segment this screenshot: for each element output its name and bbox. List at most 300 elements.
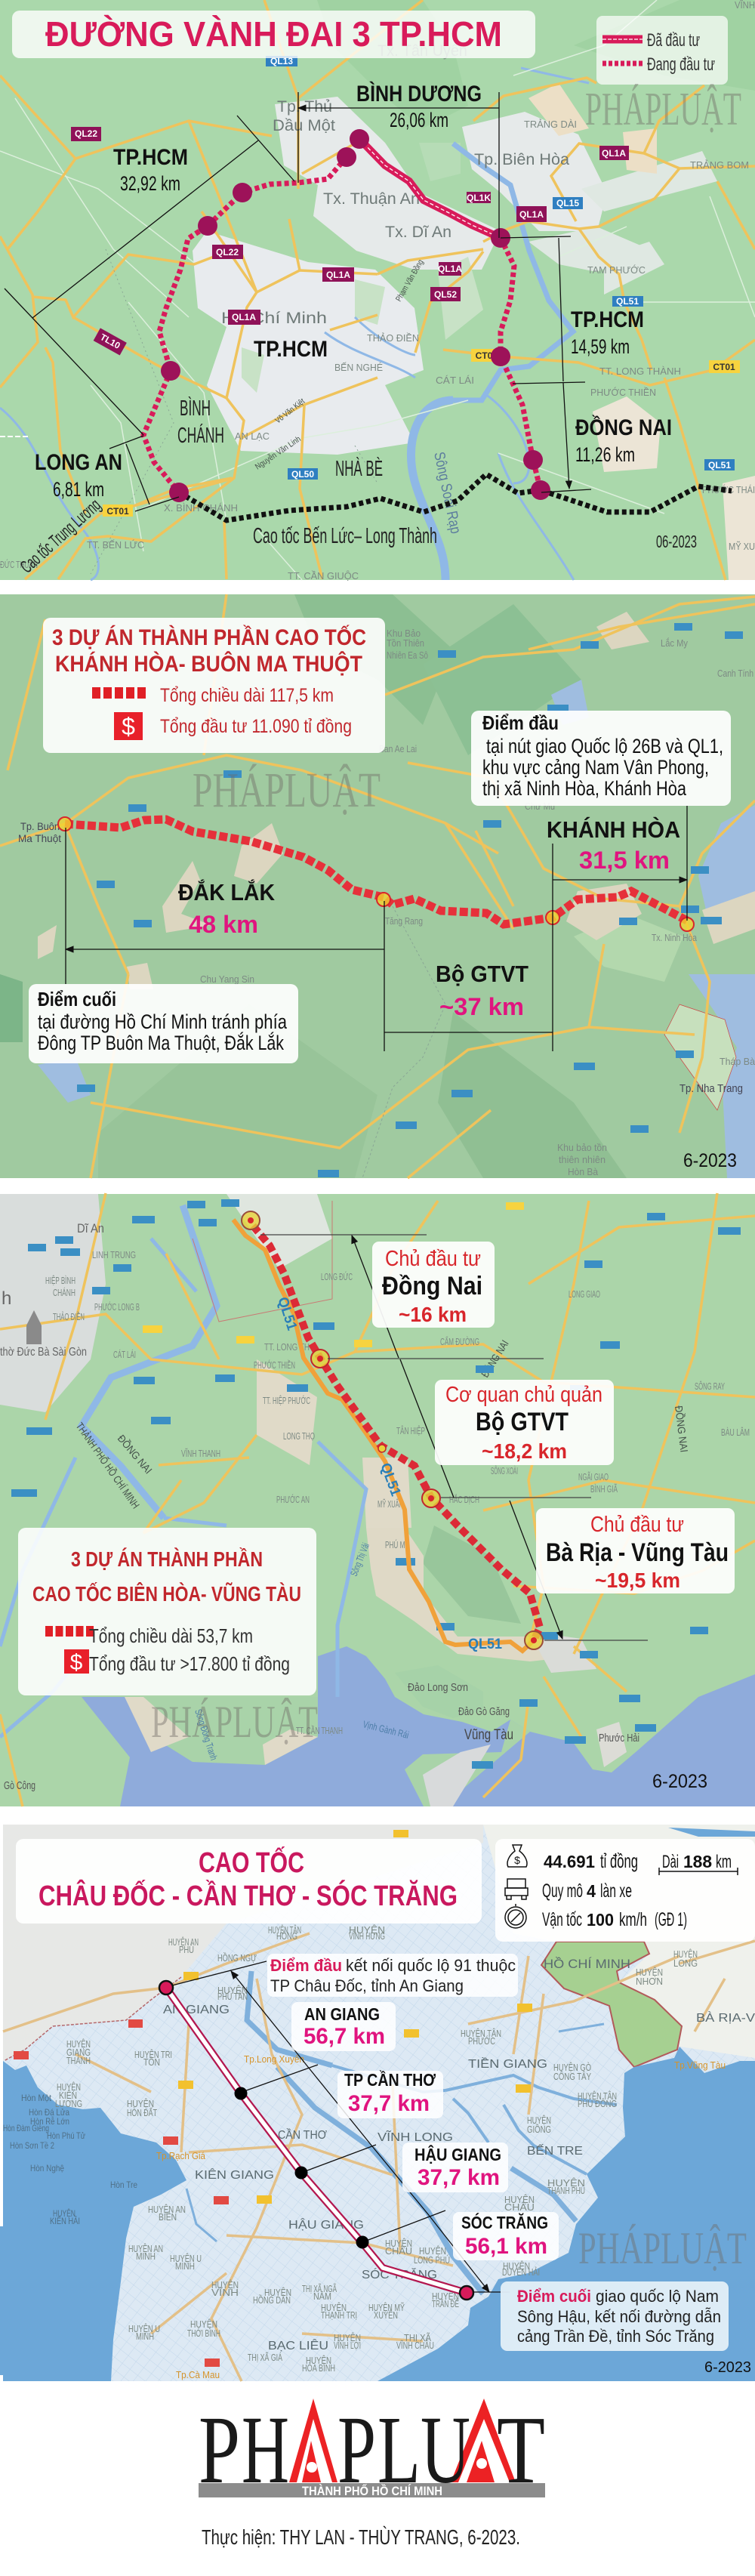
map labels: TRẢNG BOM [690, 159, 749, 171]
map labels: Tp. Nha Trang [680, 1082, 743, 1095]
icon: truck [505, 1879, 528, 1899]
map labels: CẦN THƠ [278, 2127, 327, 2142]
date: 6-2023 [652, 1771, 707, 1792]
map labels: HUYỆN [57, 2081, 81, 2093]
map labels: Nguyễn Văn Linh [253, 434, 303, 471]
place labels: NHÀ BÈ [335, 456, 383, 481]
map labels: HUYỆN AN [168, 1936, 199, 1948]
logo: Phap Luat: P [199, 2396, 240, 2504]
map labels: TRẦN ĐỀ [432, 2298, 459, 2309]
length text: 188 [683, 1852, 712, 1871]
label: TP.HCM west [113, 145, 188, 195]
road badges: CT0 [476, 350, 493, 361]
map labels: Vũng Tàu [464, 1727, 513, 1743]
map labels: TT. LONG THÀNH [599, 366, 681, 377]
map labels: CÁT LÁI [436, 375, 474, 386]
callout: Soc Trang [453, 2212, 559, 2260]
map labels: DUYÊN HẢI [502, 2266, 540, 2278]
length text: km [716, 1852, 732, 1872]
map labels: HUYỆN [321, 2302, 347, 2313]
map labels: HUYỆN AN [128, 2243, 163, 2254]
lanes text: Quy mô [542, 1880, 583, 1902]
label: Dak Lak: ĐẮK LẮK [178, 878, 276, 905]
callout: Dong Nai: Chủ đầu tư [385, 1247, 481, 1271]
icon: money bag [507, 1845, 527, 1867]
callout: start point [267, 1954, 518, 1997]
map labels: Tp. Thủ [277, 98, 332, 116]
legend box: Tổng chiều dài 53,7 km [89, 1624, 253, 1647]
map labels: BIÊN [159, 2211, 177, 2223]
label: TP.HCM west: TP.HCM [113, 145, 188, 170]
map labels: LONG ĐỨC [321, 1271, 353, 1282]
road badges: TL10 [98, 332, 122, 351]
logo: Phap Luat: THÀNH PHỐ HỒ CHÍ MINH [302, 2483, 442, 2498]
map labels [18, 628, 755, 1177]
callout: start point: kết nối quốc lộ 91 thuộc [346, 1956, 516, 1975]
cost text [544, 1849, 638, 1872]
length text [659, 1852, 738, 1875]
place labels: CHÁNH [177, 423, 224, 448]
map labels: LONG THỌ [283, 1430, 315, 1442]
map labels: Hòn Đá Lửa [29, 2107, 69, 2118]
map labels: VĨNH CHÂU [396, 2340, 434, 2351]
map labels: CHÂU [504, 2201, 535, 2213]
map labels: HUYỆN U [128, 2323, 160, 2334]
label: TP.HCM center: TP.HCM [254, 337, 328, 362]
callout: end point [501, 2281, 729, 2351]
watermark: PHÁPLUẬT [151, 1697, 318, 1747]
label: Long An: LONG AN [35, 450, 122, 475]
map labels: HUYỆN TÂN [268, 1924, 301, 1936]
map labels: MINH [175, 2260, 195, 2272]
map labels: Khu bảo tồn [557, 1142, 607, 1153]
map labels: BẾN NGHÉ [334, 362, 383, 373]
map labels: THỊ XÃ GIÁ [248, 2352, 282, 2363]
map labels: Tx. Dĩ An [385, 224, 451, 241]
nodes [242, 1211, 543, 1649]
map labels: HUYỆN TÂN [461, 2028, 501, 2039]
map labels: HUYỆN TÂN [578, 2090, 617, 2102]
icon: compass [505, 1904, 526, 1928]
road QL51: QL51 [274, 1295, 300, 1333]
road badges [178, 1830, 532, 2204]
road badges: QL52 [434, 289, 457, 300]
map labels: VĨNH LONG [378, 2129, 453, 2144]
map labels: HUYỆN [190, 2318, 217, 2330]
map labels: THÀNH PHỐ HỒ CHÍ MINH [74, 1420, 143, 1510]
icon: money bag: $ [514, 1854, 520, 1866]
callout: Hau Giang: 37,7 km [418, 2165, 500, 2190]
road badges: QL1A [438, 264, 462, 274]
map labels: Ma Thuột [18, 832, 61, 844]
callout: TP Can Tho [337, 2069, 443, 2118]
map labels: BẾN TRE [527, 2143, 583, 2158]
map labels: Tp. Buôn [20, 820, 60, 832]
label: Dong Nai [575, 415, 672, 466]
map labels: Sông Soài Rạp [430, 450, 464, 535]
road badges: QL1A [232, 312, 256, 322]
road badges [11, 1199, 741, 1769]
speed text [542, 1909, 687, 1930]
map labels: HUYỆN [432, 2291, 459, 2302]
map labels: Chư Mu [525, 801, 555, 812]
map labels: Võ Văn Kiệt [273, 397, 307, 425]
expressway route [253, 1226, 540, 1640]
legend box [43, 618, 385, 753]
map labels: HIỆP BÌNH [45, 1275, 76, 1286]
road badges: QL22 [216, 247, 239, 258]
logo: Phap Luat: H [242, 2396, 289, 2504]
map labels: THỊ XÃ [404, 2332, 431, 2343]
road badges: QL1A [519, 209, 544, 220]
map labels: THẢO ĐIỀN [367, 332, 419, 344]
label: Binh Duong: 26,06 km [390, 109, 448, 131]
map labels: HUYỆN [547, 2177, 585, 2189]
map labels: CHÁNH [53, 1287, 76, 1298]
legend box: 3 DỰ ÁN THÀNH PHẦN [71, 1547, 263, 1571]
map labels: HỒ CHÍ MINH [544, 1957, 630, 1971]
map labels: Tp.Rạch Giá [156, 2150, 206, 2161]
road badges: QL15 [556, 198, 579, 208]
map labels: HUYỆN [127, 2098, 154, 2109]
expressway route [65, 819, 687, 924]
label: Bo GTVT: Bộ GTVT [436, 961, 528, 987]
map labels: HẬU GIANG [288, 2217, 364, 2232]
map labels: KIÊN [59, 2090, 77, 2101]
road badges: QL1A [602, 148, 626, 159]
map labels: SÔNG RAY [695, 1381, 725, 1392]
map labels: VĨNH [211, 2287, 239, 2298]
length text: Dài [662, 1852, 679, 1872]
label: TP.HCM west: 32,92 km [120, 172, 180, 195]
label: TP.HCM east [571, 307, 644, 358]
map labels: CHÂU [385, 2245, 412, 2257]
place labels: Cao tốc Trung Lương [17, 495, 105, 577]
start point box: thị xã Ninh Hòa, Khánh Hòa [482, 777, 687, 800]
map labels: HUYỆN [503, 2260, 530, 2272]
title box [16, 1839, 482, 1924]
logo: Phap Luat: U [421, 2396, 470, 2504]
road badges: QL1A [326, 270, 350, 280]
info box [495, 1839, 755, 1942]
map labels: LONG [673, 1957, 698, 1969]
map labels: Tp.Cà Mau [176, 2369, 220, 2380]
measure lines [66, 806, 687, 1051]
label: Bo GTVT [436, 961, 528, 1020]
callout: Dong Nai: Đồng Nai [382, 1272, 482, 1300]
map labels: HUYỆN [385, 2238, 412, 2249]
callout: Soc Trang: SÓC TRĂNG [461, 2212, 548, 2232]
panel: Khanh Hoa - Buon Ma Thuot [0, 594, 755, 1178]
callout: An Giang [291, 2002, 396, 2051]
map labels: SÔNG XOÀI [491, 1465, 518, 1476]
nodes [159, 1981, 473, 2300]
map labels: TT. LONG TH [264, 1341, 310, 1353]
map labels: Sông Thị Vải [348, 1541, 371, 1578]
map labels: Dầu Một [273, 117, 335, 134]
map labels: THẠNH PHÚ [547, 2185, 585, 2196]
map labels: HUYỆN [211, 2279, 239, 2291]
map labels: THỊ XÃ NGÃ [302, 2283, 337, 2294]
credit: Thực hiện: THY LAN - THÙY TRANG, 6-2023. [202, 2525, 520, 2549]
legend box: $ [122, 713, 135, 740]
map labels: Hòn Rễ Lớn [30, 2115, 69, 2127]
legend: Đã đầu tư [647, 30, 700, 51]
road badges: CT01 [106, 506, 129, 517]
map labels: ĐỒNG NAI [478, 1337, 511, 1380]
map labels: HUYỆN [419, 2245, 446, 2257]
callout: Bo GTVT [435, 1380, 614, 1465]
legend box [18, 1528, 316, 1695]
end point box: Điểm cuối [38, 988, 116, 1010]
map labels: THỚI BÌNH [187, 2328, 220, 2339]
map labels: Đảo Gò Găng [458, 1705, 510, 1718]
map labels: Hòn Một [21, 2093, 52, 2103]
map labels: TT. CẦN GIUỘC [288, 570, 359, 582]
map labels: CÔNG TÂY [553, 2071, 591, 2082]
speed text: (GĐ 1) [655, 1909, 687, 1930]
legend box: Tổng đầu tư >17.800 tỉ đồng [89, 1652, 290, 1675]
start point box: Điểm đầu [482, 711, 559, 734]
callout: Bo GTVT: Bộ GTVT [476, 1408, 569, 1436]
map labels: PHƯỚC THIỀN [254, 1359, 295, 1371]
callout: Ba Ria - Vung Tau: Chủ đầu tư [590, 1513, 684, 1537]
expressway Ben Luc - Long Thanh [179, 474, 732, 520]
map labels: THÀNH [66, 2055, 91, 2066]
road QL51 [233, 1220, 534, 1652]
date: 6-2023 [683, 1150, 737, 1171]
map labels: HÒA BÌNH [302, 2362, 335, 2374]
map labels: HUYỆN GÒ [553, 2062, 591, 2073]
map labels: X. BÌNH CHÁNH [164, 502, 238, 514]
map labels: THẠNH TRỊ [321, 2309, 357, 2321]
callout: Bo GTVT: ~18,2 km [482, 1439, 567, 1463]
node circles [161, 129, 550, 502]
map labels: LƯƠNG [55, 2098, 82, 2109]
callout: Hau Giang: HẬU GIANG [414, 2144, 501, 2164]
lanes text: 4 [587, 1881, 596, 1901]
map labels: Gò Công [4, 1779, 35, 1792]
map labels: BÀ RỊA-V [696, 2010, 755, 2025]
map labels: TIỀN GIANG [468, 2056, 547, 2071]
place labels: 06-2023 [656, 532, 697, 551]
watermark: PHÁPLUẬT [193, 763, 381, 818]
map labels: HUYỆN [636, 1967, 663, 1978]
map labels: HỒNG NGỰ [217, 1952, 257, 1964]
map labels: GIỒNG [527, 2124, 551, 2135]
map labels: SÓC TRĂNG [362, 2267, 437, 2281]
map labels: MỸ XUÂN [378, 1498, 403, 1510]
map labels: NGÃI GIAO [578, 1471, 609, 1482]
title box: CHÂU ĐỐC - CẦN THƠ - SÓC TRĂNG [39, 1878, 458, 1912]
map labels: NHƠN [636, 1976, 663, 1987]
legend box: 3 DỰ ÁN THÀNH PHẦN CAO TỐC [52, 625, 366, 650]
start point box [471, 711, 731, 806]
road badges: CT01 [713, 362, 735, 372]
speed text: Vận tốc [542, 1909, 582, 1930]
cost text: 44.691 [544, 1852, 595, 1871]
title box: ĐƯỜNG VÀNH ĐAI 3 TP.HCM [45, 14, 502, 54]
map labels: HUYỆN U [170, 2253, 202, 2264]
map labels: PHÚ ĐÔNG [578, 2098, 617, 2109]
road badges: QL51 [708, 460, 731, 470]
road QL51: QL51 [468, 1637, 502, 1652]
map labels: XUYÊN [374, 2309, 398, 2321]
map labels: HUYỆN [349, 1924, 385, 1936]
map labels: HUYỆN [264, 2287, 291, 2298]
callout: end point: Điểm cuối [517, 2287, 591, 2306]
map labels: TT. HIỆP PHƯỚC [263, 1395, 310, 1406]
legend box: CAO TỐC BIÊN HÒA- VŨNG TÀU [32, 1581, 301, 1606]
measure lines [5, 92, 591, 511]
map labels: LONG PHÚ [414, 2254, 450, 2266]
road badges: QL1K [467, 193, 491, 203]
callout: An Giang: AN GIANG [304, 2004, 380, 2024]
map labels: THẢO ĐIỀN [53, 1311, 85, 1322]
map labels: HUYỆN [527, 2115, 551, 2126]
label: Dong Nai: 11,26 km [575, 443, 635, 466]
date: 6-2023 [704, 2359, 751, 2376]
map labels: CẨM ĐƯỜNG [440, 1336, 479, 1347]
road badges [71, 56, 740, 517]
legend box: Tổng chiều dài 117,5 km [160, 685, 334, 706]
measure lines [166, 1961, 510, 2292]
map labels: Ban Ae Lai [379, 743, 417, 754]
map labels: GIANG [66, 2047, 91, 2058]
callout: Dong Nai: ~16 km [399, 1303, 467, 1326]
map labels: Phạm Văn Đồng [394, 258, 426, 304]
map labels: CÁT LÁI [113, 1349, 136, 1360]
map labels: Hòn Bà [568, 1166, 599, 1177]
map labels: HUYỆN AN [148, 2204, 186, 2215]
map labels: KIÊN HẢI [50, 2215, 80, 2226]
map labels: HUYỆN TRI [134, 2049, 172, 2060]
road badges: QL50 [291, 469, 314, 480]
map labels: TT. BẾN LỨC [87, 539, 144, 551]
label: Binh Duong: BÌNH DƯƠNG [356, 81, 482, 106]
map labels: PHÚ TÂN [217, 1991, 248, 2002]
road badges: QL51 [616, 296, 639, 307]
map labels: HUYỆN [334, 2332, 361, 2343]
map labels: h [2, 1288, 11, 1309]
map labels: HỒNG DÂN [253, 2294, 291, 2306]
label: Long An [35, 450, 122, 501]
map labels: Tx. Tân Uyên [378, 42, 467, 60]
map labels: BẠC LIÊU [268, 2338, 328, 2352]
map labels: ĐỒNG NAI [673, 1405, 691, 1453]
map labels: HÒN ĐẤT [127, 2107, 157, 2118]
label: Dong Nai: ĐỒNG NAI [575, 415, 672, 440]
map labels: thờ Đức Bà Sài Gòn [0, 1346, 87, 1359]
map labels: BÌNH GIÃ [590, 1483, 618, 1495]
map labels: Lắc My [661, 637, 688, 649]
map labels: Hồ Chí Minh [221, 310, 327, 327]
map labels: Phước Hải [599, 1732, 639, 1745]
label: TP.HCM east: 14,59 km [571, 335, 630, 358]
map labels: HUYỆN [306, 2355, 331, 2366]
legend [596, 16, 728, 85]
map labels: VĨNH LỢI [334, 2340, 361, 2351]
map labels: TT. CẦN THẠNH [296, 1725, 343, 1736]
logo: Phap Luat: P [337, 2396, 376, 2504]
map labels: TRẢNG DÀI [524, 119, 577, 130]
map labels: TAM PHƯỚC [587, 264, 646, 276]
map labels: Sông Đồng Tranh [193, 1708, 220, 1762]
map labels: TÂN HIỆP [396, 1425, 425, 1436]
map labels: HUYỆN MỸ [368, 2302, 405, 2313]
map labels: MINH [136, 2331, 154, 2342]
map labels [0, 1221, 750, 1792]
panel: Chau Doc - Can Tho - Soc Trang [0, 1825, 755, 2381]
label: Bo GTVT: ~37 km [439, 993, 524, 1020]
callout: TP Can Tho: 37,7 km [348, 2091, 430, 2116]
callout: start point: TP Châu Đốc, tỉnh An Giang [270, 1976, 464, 1995]
nodes [58, 817, 694, 931]
map labels: TÔN [143, 2056, 160, 2068]
map labels: HỒNG [276, 1930, 297, 1942]
lanes text: làn xe [600, 1880, 632, 1902]
measure lines [260, 1235, 648, 1640]
map labels: thiên nhiên [559, 1154, 606, 1165]
label: Binh Duong [356, 81, 482, 131]
label: TP.HCM east: TP.HCM [571, 307, 644, 332]
logo: Phap Luat: T [497, 2396, 545, 2504]
legend box: KHÁNH HÒA- BUÔN MA THUỘT [55, 651, 362, 677]
map labels: Tp.Long Xuyên [244, 2053, 304, 2065]
map labels: Tp. Biên Hòa [474, 151, 569, 168]
map labels: Hòn Tre [110, 2180, 137, 2190]
map labels: Tồn Thiên [387, 637, 424, 649]
road badges: QL22 [75, 128, 97, 139]
label: Khanh Hoa: KHÁNH HÒA [547, 816, 680, 843]
logo: Phap Luat [199, 2396, 545, 2504]
place labels: Cao tốc Bến Lức– Long Thành [253, 524, 437, 548]
callout: Ba Ria - Vung Tau [536, 1508, 735, 1593]
map labels: Nhiên Ea Sô [387, 649, 428, 661]
callout: end point: Sông Hậu, kết nối đường dẫn [517, 2307, 721, 2326]
callout: end point: cảng Trần Đề, tỉnh Sóc Trăng [517, 2327, 714, 2346]
road badges [77, 623, 743, 1177]
map labels: MINH [136, 2251, 156, 2262]
map labels: Tăng Rang [385, 915, 423, 927]
map labels: ĐỨC THUẬN [0, 559, 38, 570]
callout: start point: Điểm đầu [270, 1956, 342, 1975]
map labels: Hòn Đàm Giềng [3, 2123, 49, 2133]
map labels: HUYỆN [53, 2207, 76, 2219]
callout: Bo GTVT: Cơ quan chủ quản [445, 1383, 602, 1407]
callout: end point: giao quốc lộ Nam [596, 2287, 719, 2306]
logo: Phap Luat: L [378, 2396, 421, 2504]
place labels: BÌNH [180, 396, 211, 421]
label: Dak Lak: 48 km [189, 911, 258, 938]
map labels: Đảo Long Sơn [408, 1681, 468, 1694]
map labels: PHÚ [179, 1944, 194, 1955]
map labels: PHƯỚC [468, 2035, 495, 2047]
ring road invested [359, 139, 501, 238]
map labels: Vịnh Gành Rái [362, 1718, 410, 1741]
speed text: 100 [587, 1910, 614, 1930]
map labels: VĨNH THANH [181, 1448, 220, 1459]
label: Dak Lak [178, 878, 276, 938]
map labels: HUYỆN [66, 2038, 91, 2050]
callout: TP Can Tho: TP CẦN THƠ [344, 2069, 436, 2090]
legend box: $ [70, 1650, 83, 1675]
map labels: HUYỆN [673, 1948, 698, 1960]
map labels: PHÚ MỸ [385, 1539, 409, 1550]
map labels: KIÊN GIANG [195, 2167, 274, 2182]
callout: Dong Nai [372, 1242, 495, 1328]
map labels: HẮC DỊCH [449, 1494, 479, 1505]
